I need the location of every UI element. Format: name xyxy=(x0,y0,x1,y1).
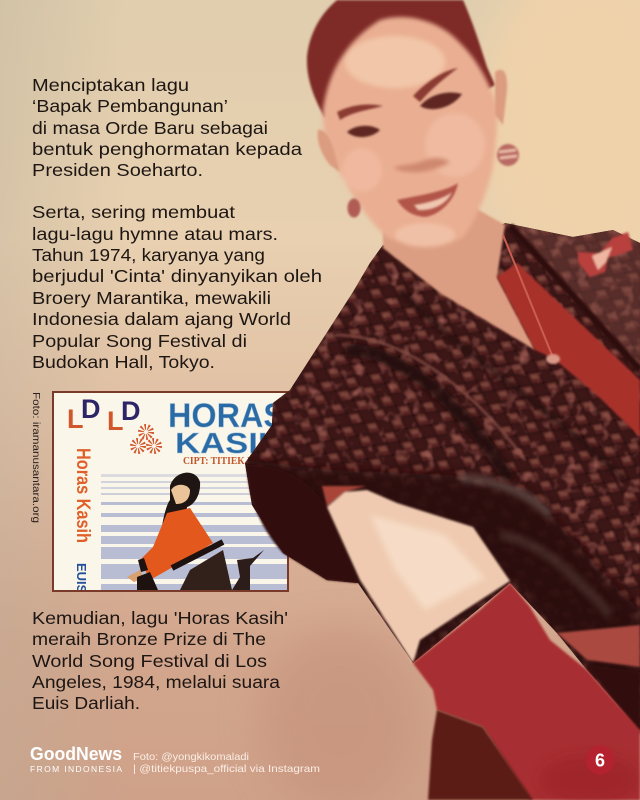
text block: paragraph 2: Budokan Hall, Tokyo. xyxy=(32,352,215,372)
text block: paragraph 2: lagu-lagu hymne atau mars. xyxy=(32,224,278,244)
hair xyxy=(307,0,495,118)
text block: paragraph 2 xyxy=(32,202,322,372)
text block: paragraph 1: Presiden Soeharto. xyxy=(32,160,203,180)
logos: L xyxy=(67,404,84,434)
text block: paragraph 3: Angeles, 1984, melalui suara xyxy=(32,672,280,692)
logos: D xyxy=(121,396,140,426)
cover woman xyxy=(127,473,264,590)
right lapel tone xyxy=(505,223,640,372)
text block: paragraph 1: ‘Bapak Pembangunan’ xyxy=(32,96,228,116)
neck and chest xyxy=(383,205,535,350)
portrait of the singer xyxy=(240,0,640,800)
footer photo credits: Foto: @yongkikomaladi xyxy=(133,751,249,763)
flowers xyxy=(133,427,159,451)
text block: paragraph 1: Menciptakan lagu xyxy=(32,75,189,95)
logo: GoodNews from Indonesia xyxy=(30,744,122,774)
stripes xyxy=(101,474,287,590)
lower dark folds xyxy=(245,454,640,694)
cassette cover photo xyxy=(52,391,289,594)
text block: paragraph 2: Indonesia dalam ajang World xyxy=(32,309,291,329)
cover title xyxy=(170,403,273,454)
text block: paragraph 3: meraih Bronze Prize di The xyxy=(32,629,266,649)
dark sleeve underside xyxy=(247,465,358,583)
logo: GoodNews from Indonesia: GoodNews xyxy=(30,744,122,764)
spine text: Horas Kasih xyxy=(72,448,93,543)
cover title: KASIH xyxy=(175,428,283,460)
earrings xyxy=(348,144,519,218)
text block: paragraph 3 xyxy=(32,608,288,713)
page number badge xyxy=(586,746,614,774)
page number badge: 6 xyxy=(595,750,605,770)
red sash xyxy=(557,625,640,667)
text block: paragraph 3: Euis Darliah. xyxy=(32,693,140,713)
text block: paragraph 2: Popular Song Festival di xyxy=(32,331,247,351)
footer photo credits: | @titiekpuspa_official via Instagram xyxy=(133,763,320,775)
ears xyxy=(318,70,507,172)
cover title: HORAS xyxy=(168,397,285,435)
red blouse xyxy=(497,263,640,437)
spine text xyxy=(77,449,91,590)
text block: paragraph 1: di masa Orde Baru sebagai xyxy=(32,118,268,138)
necklace and pendant xyxy=(503,235,560,364)
face xyxy=(323,17,497,247)
text block: paragraph 2: Serta, sering membuat xyxy=(32,202,235,222)
dark lapel line xyxy=(510,226,640,370)
cover credit: CIPT: TITIEK P xyxy=(183,456,253,467)
spine text: EUIS xyxy=(74,563,89,594)
text block: paragraph 3: Kemudian, lagu 'Horas Kasih' xyxy=(32,608,288,628)
sleeve sheen xyxy=(460,478,550,515)
quilted jacket xyxy=(240,220,640,740)
text block: paragraph 3: World Song Festival di Los xyxy=(32,651,267,671)
jacket creases xyxy=(345,350,510,480)
text block: paragraph 1 xyxy=(32,75,302,180)
red glove xyxy=(413,583,640,800)
text block: paragraph 1: bentuk penghormatan kepada xyxy=(32,139,302,159)
white shirt sleeve xyxy=(322,486,510,663)
vertical photo credit: Foto: iramanusantara.org xyxy=(30,392,42,523)
dark skirt xyxy=(428,710,533,800)
brooch xyxy=(578,232,633,277)
text block: paragraph 2: Tahun 1974, karyanya yang xyxy=(32,245,265,265)
footer photo credits xyxy=(133,751,320,775)
logos: D xyxy=(81,394,100,424)
logos xyxy=(68,400,140,430)
nose and mouth xyxy=(393,158,458,217)
eyes and brows xyxy=(337,68,462,137)
text block: paragraph 2: Broery Marantika, mewakili xyxy=(32,288,271,308)
logo: GoodNews from Indonesia: FROM INDONESIA xyxy=(30,764,122,774)
text block: paragraph 2: berjudul 'Cinta' dinyanyikan oleh xyxy=(32,266,322,286)
dark area behind glove xyxy=(587,665,640,735)
logos: L xyxy=(107,406,124,436)
